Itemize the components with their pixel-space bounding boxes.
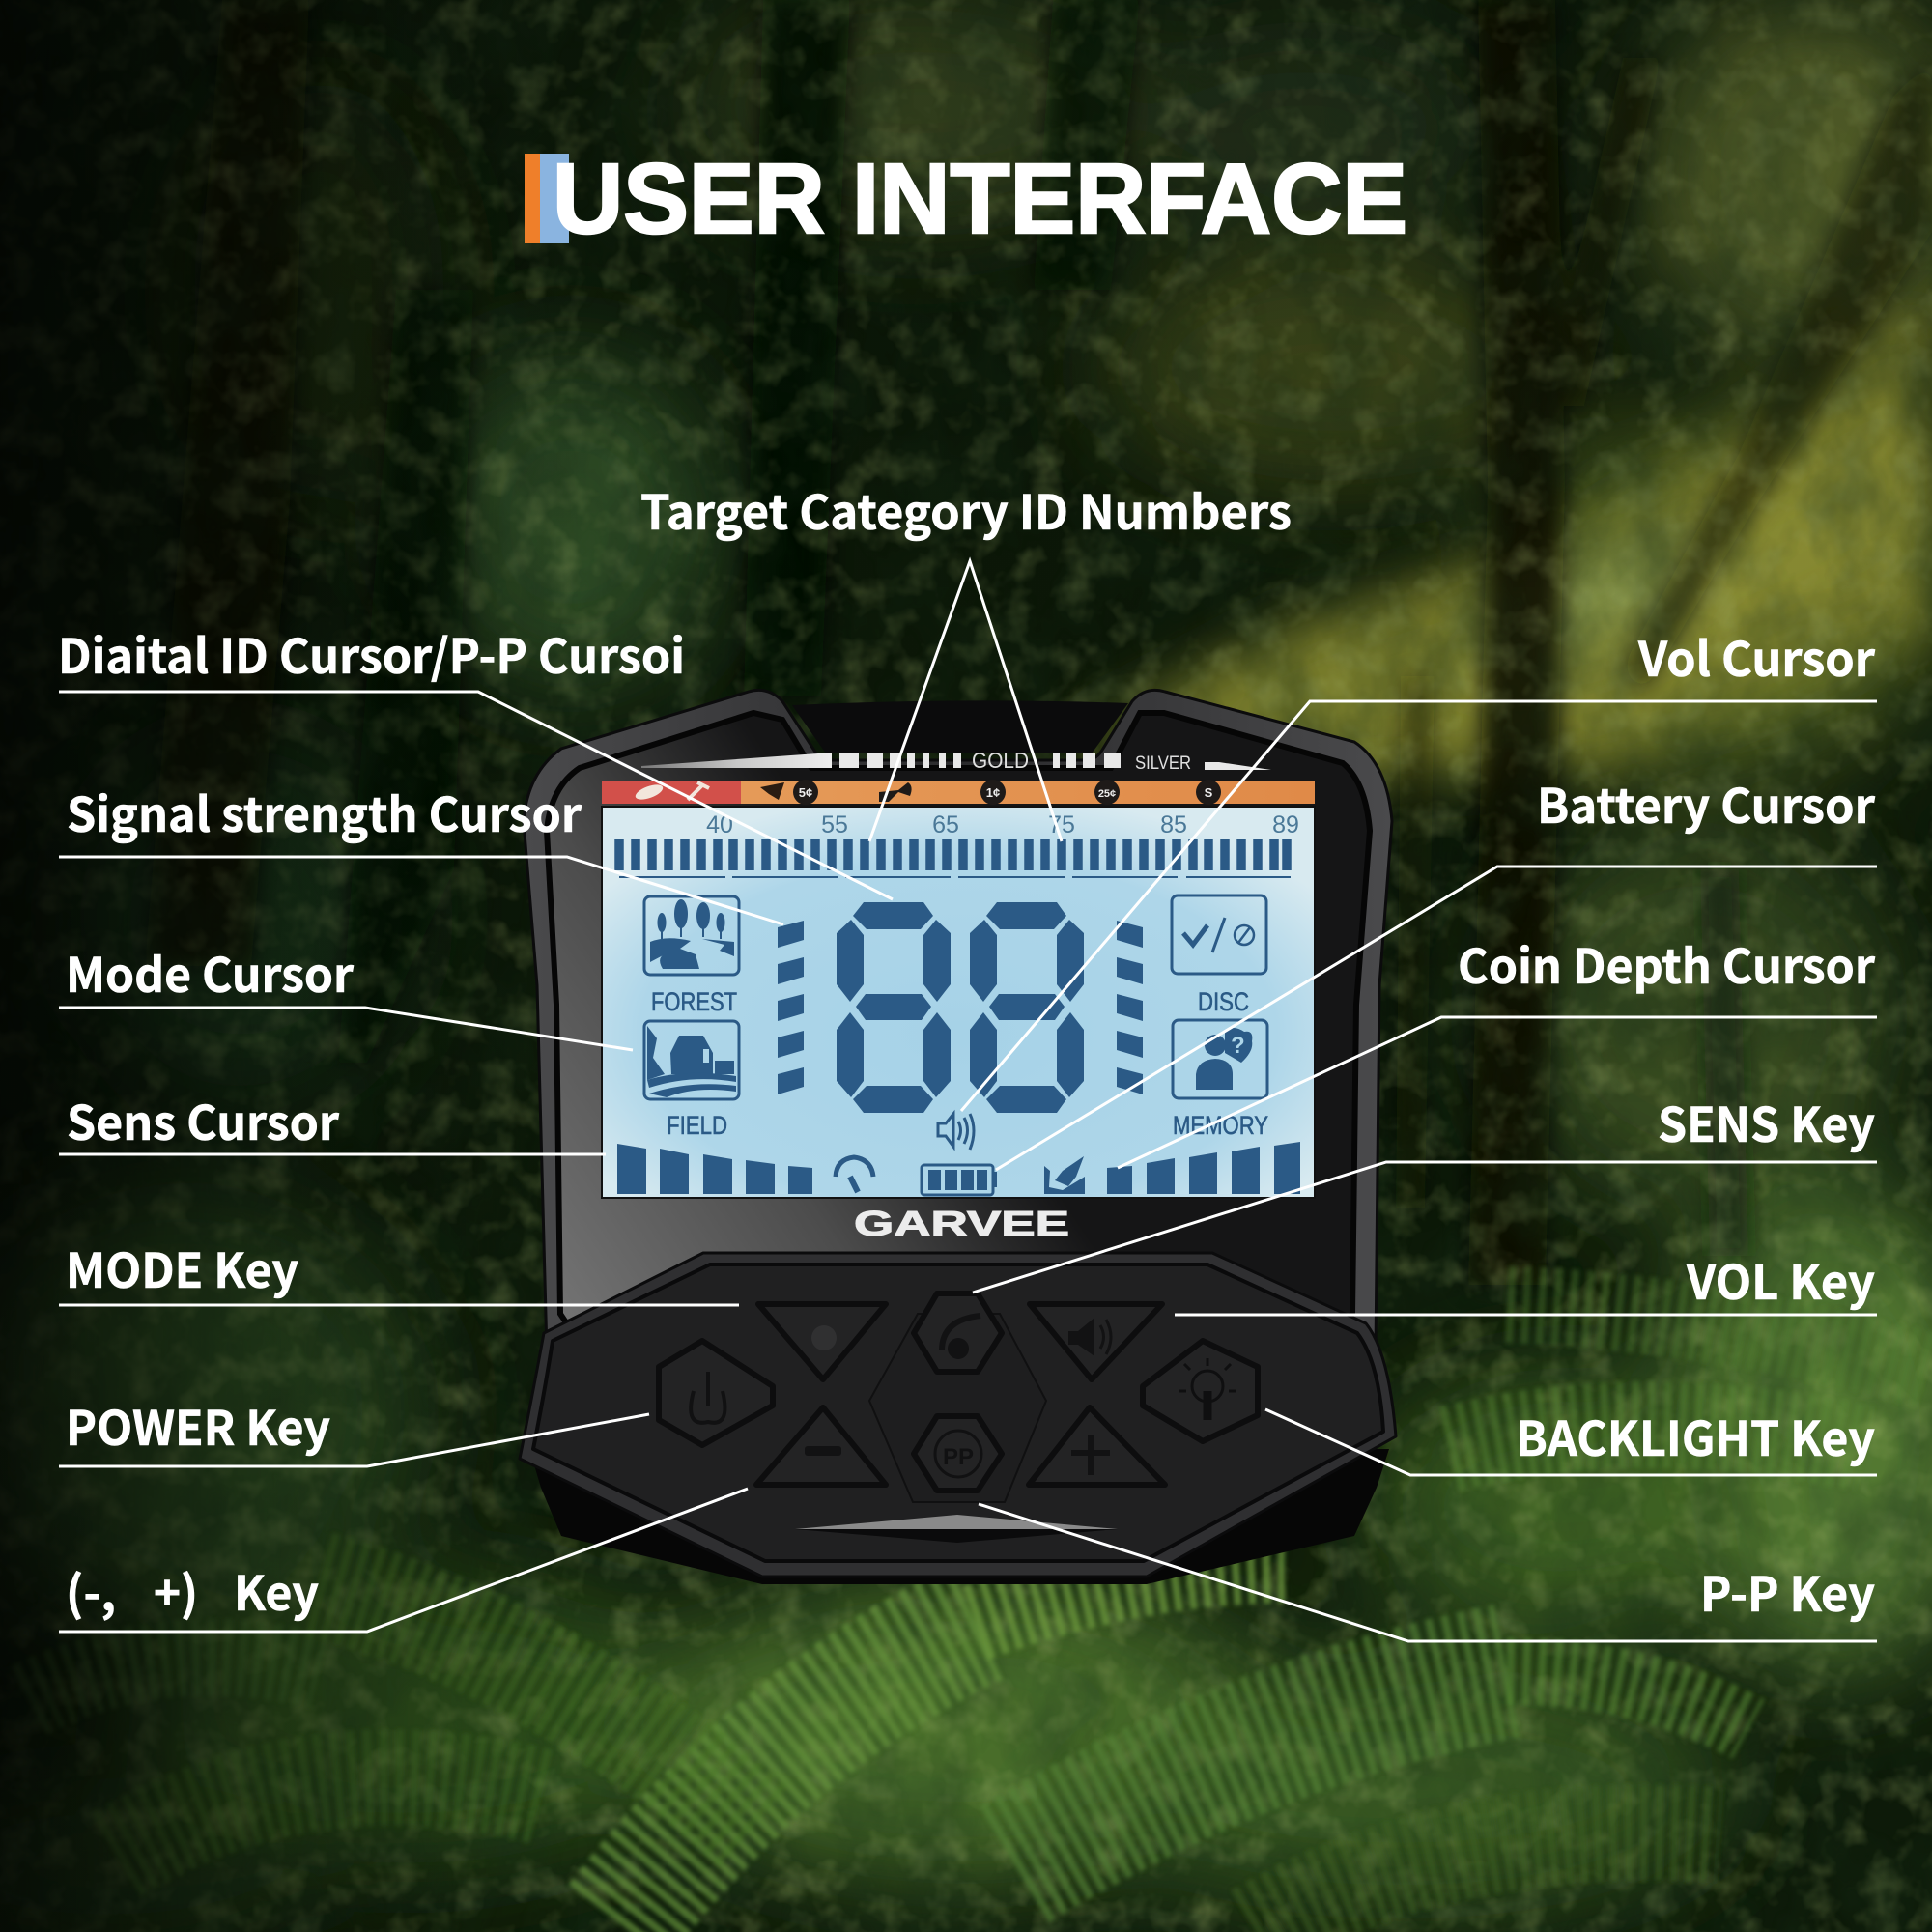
minus button <box>756 1407 886 1485</box>
LCD screen <box>602 807 1315 1198</box>
device <box>520 690 1396 1584</box>
label: sens cursor: Sens Cursor <box>67 1086 340 1154</box>
LCD scale numbers: 40 <box>706 811 733 838</box>
P-P button: PP <box>943 1444 974 1470</box>
metal scale strip: SILVER <box>1135 753 1191 774</box>
VOL button <box>1030 1304 1162 1379</box>
icon: disc mode <box>1172 895 1266 974</box>
keypad panel <box>520 1253 1396 1577</box>
icon: shovel coin depth <box>1044 1156 1085 1194</box>
screen surround face <box>547 713 1370 1343</box>
icon: battery <box>922 1165 997 1195</box>
fern fronds <box>29 1304 1932 1932</box>
label FIELD: FIELD <box>667 1111 727 1140</box>
metal scale strip <box>641 748 1271 774</box>
top notch <box>792 700 1128 753</box>
LCD scale numbers: 85 <box>1160 811 1187 838</box>
LCD scale numbers: 65 <box>932 811 959 838</box>
LCD scale numbers: 75 <box>1048 811 1075 838</box>
LCD scale numbers: 55 <box>821 811 848 838</box>
target category band: 25¢ <box>1098 788 1116 800</box>
device rear shell <box>529 1449 1389 1584</box>
P-P button <box>914 1416 1002 1491</box>
tree trunks <box>145 0 1932 1285</box>
label: battery cursor: Battery Cursor <box>1537 769 1876 838</box>
center octagon outline <box>869 1314 1046 1502</box>
signal strength bars right <box>1117 921 1143 1094</box>
brand logo: GARVEE <box>854 1204 1069 1243</box>
LCD ID bar scale <box>619 839 1291 877</box>
label: mode cursor: Mode Cursor <box>66 938 355 1007</box>
depth bars <box>1107 1142 1300 1194</box>
label FOREST: FOREST <box>651 987 737 1016</box>
label: minus plus key: (-, <box>66 1556 116 1625</box>
label: power key: POWER Key <box>66 1391 330 1460</box>
metal scale strip: GOLD <box>972 748 1029 773</box>
icon: speaker <box>938 1114 974 1150</box>
label: minus plus key: +) <box>154 1556 198 1625</box>
label: signal strength: Signal strength Cursor <box>67 778 582 846</box>
BACKLIGHT button <box>1143 1341 1258 1441</box>
digit 8 left <box>837 902 951 1113</box>
target category band <box>602 780 1315 805</box>
label: digital ID cursor: Diaital ID Cursor/P-P Cursoi <box>58 619 685 688</box>
title accent bars <box>525 154 569 243</box>
label: vol key: VOL Key <box>1686 1245 1875 1314</box>
device body <box>524 690 1392 1352</box>
label: backlight key: BACKLIGHT Key <box>1516 1402 1875 1470</box>
icon: sensitivity gauge <box>836 1157 873 1192</box>
label: mode key: MODE Key <box>66 1234 298 1302</box>
POWER button <box>659 1341 773 1445</box>
label: target category: Target Category ID Numbers <box>640 475 1292 544</box>
label: sens key: SENS Key <box>1658 1088 1875 1156</box>
MODE button <box>758 1304 886 1379</box>
label MEMORY: MEMORY <box>1173 1111 1268 1140</box>
label: vol cursor: Vol Cursor <box>1637 622 1876 691</box>
digit 8 right <box>970 902 1084 1113</box>
label: coin depth cursor: Coin Depth Cursor <box>1458 929 1876 998</box>
target category band: 1¢ <box>986 785 1000 800</box>
keypad wedge logo <box>795 1515 1118 1543</box>
sensitivity bars <box>617 1144 812 1194</box>
plus button <box>1029 1407 1165 1485</box>
sun beam <box>1063 290 1932 782</box>
label: minus plus key <box>66 1556 319 1625</box>
icon: memory mode: ? <box>1231 1033 1245 1059</box>
label DISC: DISC <box>1198 987 1249 1016</box>
target category band: S <box>1205 785 1213 800</box>
label: minus plus key: Key <box>234 1556 319 1625</box>
SENS button <box>914 1293 1002 1372</box>
icon: forest mode <box>644 896 739 975</box>
LCD scale numbers: 89 <box>1272 811 1299 838</box>
LCD scale numbers <box>706 811 1299 838</box>
icon: memory mode <box>1173 1020 1267 1098</box>
label: p-p key: P-P Key <box>1700 1557 1875 1626</box>
title: USER INTERFACE <box>553 143 1407 254</box>
icon: field mode <box>644 1021 739 1099</box>
leader lines <box>59 561 1877 1641</box>
signal strength bars left <box>778 921 804 1094</box>
target category band: 5¢ <box>799 785 812 800</box>
